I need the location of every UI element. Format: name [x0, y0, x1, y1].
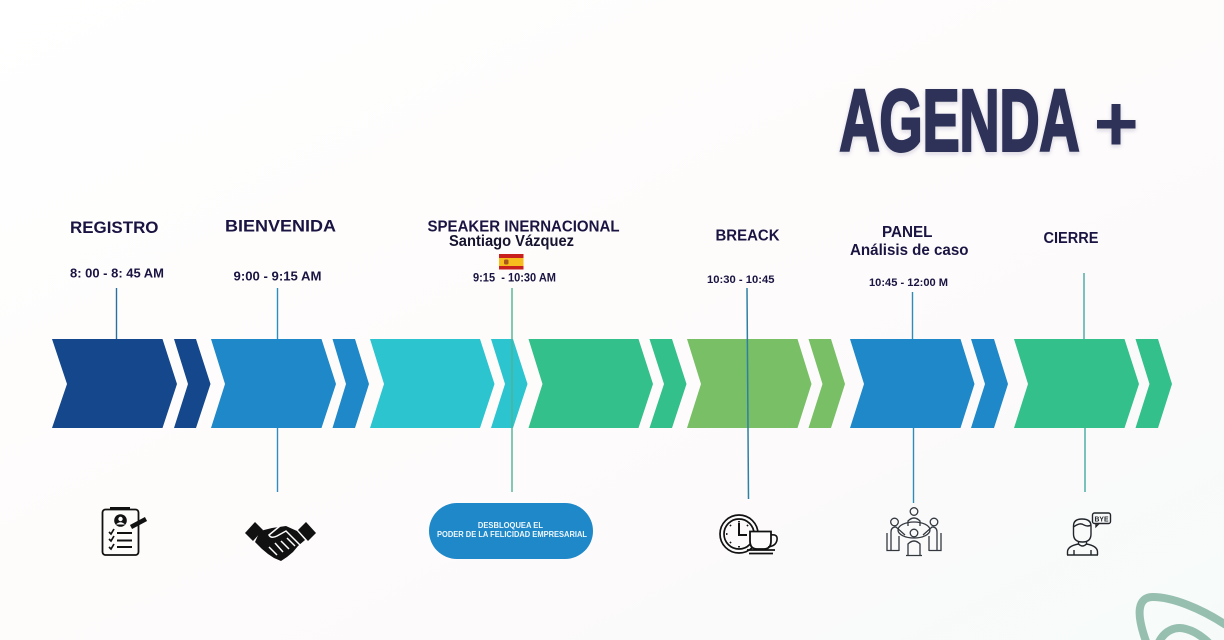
button: desbloquea: [429, 503, 593, 559]
speech bubble text: BYE: [1094, 514, 1108, 524]
icon: person saying bye: [1067, 513, 1110, 555]
icon: clock and coffee: [720, 515, 777, 554]
time: panel: 10:45 - 12:00 M: [869, 277, 948, 289]
line: speaker: [511, 288, 513, 492]
heading: registro: REGISTRO: [70, 218, 158, 237]
chevron 3: speaker: [370, 339, 528, 428]
heading: bienvenida: BIENVENIDA: [225, 218, 336, 236]
chevron 2: bienvenida: [211, 339, 369, 428]
heading: speaker: SPEAKER INERNACIONAL: [428, 218, 620, 236]
connector lines: [116, 273, 1085, 503]
chevron 7: cierre: [1014, 339, 1172, 428]
heading: panel: PANEL: [882, 224, 932, 241]
chevron 5: break: [687, 339, 845, 428]
speaker name: Santiago Vázquez: [449, 233, 574, 250]
time: break: 10:30 - 10:45: [707, 274, 774, 286]
button text: DESBLOQUEA EL: [478, 521, 543, 530]
icon: spain flag: [499, 254, 524, 270]
time: bienvenida: 9:00 - 9:15 AM: [234, 270, 322, 284]
chevron 1: registro: [52, 339, 210, 428]
heading: cierre: CIERRE: [1044, 230, 1098, 247]
subheading: panel: Análisis de caso: [850, 242, 968, 259]
time: registro: 8: 00 - 8: 45 AM: [70, 266, 164, 280]
icon: registration clipboard: [102, 508, 146, 555]
time: speaker: 9:15 - 10:30 AM: [473, 272, 556, 284]
decorative swirl: [1140, 597, 1224, 640]
icon: handshake: [245, 522, 316, 561]
heading: break: BREACK: [716, 228, 780, 244]
icon: meeting table: [887, 508, 941, 556]
line: break: [747, 288, 748, 499]
title: AGENDA: [840, 72, 1080, 170]
chevron 6: panel: [850, 339, 1008, 428]
chevron 4: speaker continued: [528, 339, 686, 428]
plus sign: [1097, 104, 1136, 144]
button text: PODER DE LA FELICIDAD EMPRESARIAL: [437, 530, 587, 539]
